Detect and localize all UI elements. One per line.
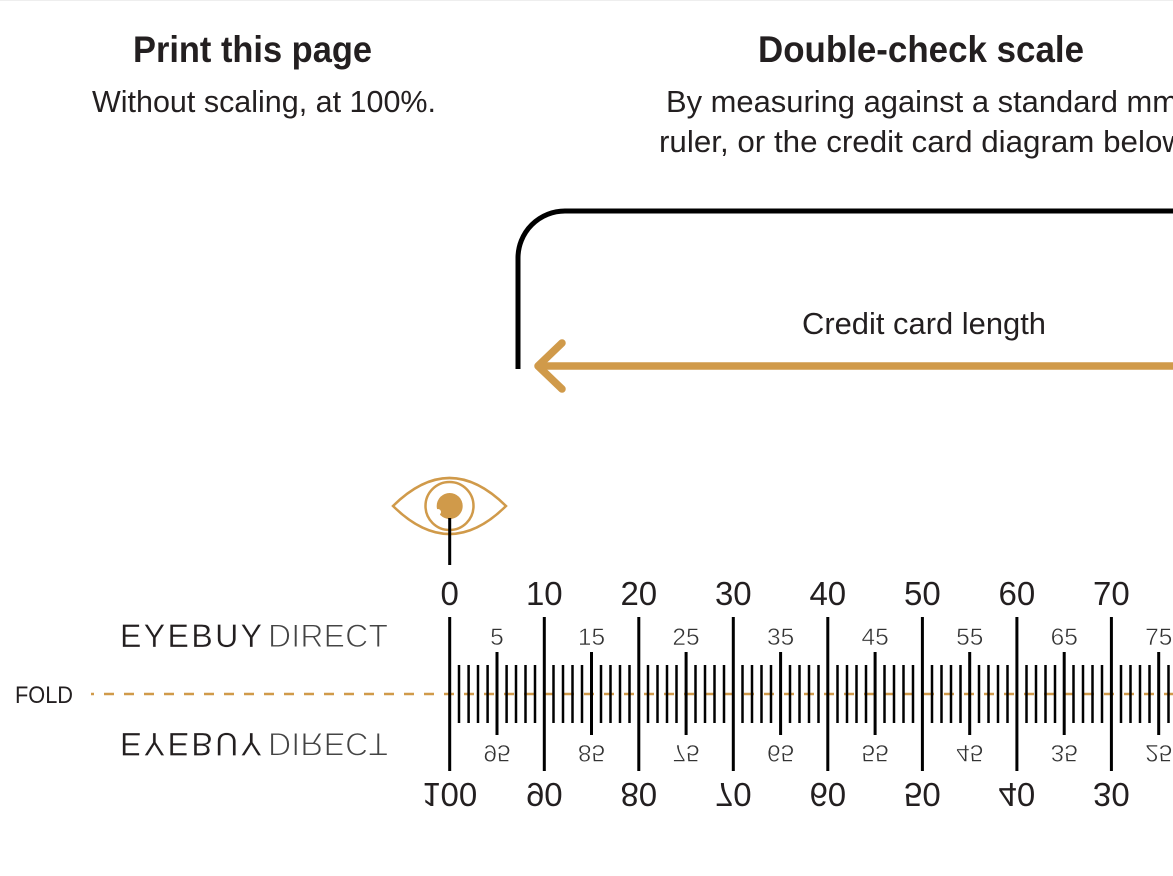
fold dashes	[91, 693, 1173, 695]
arrow: credit card length	[538, 343, 1173, 389]
text: scale instructions: By measuring against a standard mm	[666, 84, 1173, 119]
ruler numbers: bottom small flipped: 75	[672, 739, 700, 766]
fold label: FOLD	[15, 682, 73, 709]
logo: EYEBUY	[120, 618, 262, 654]
ruler numbers: top small: 75	[1145, 624, 1172, 651]
ruler numbers: bottom small flipped: 65	[767, 739, 794, 766]
text: scale instructions	[659, 84, 1173, 159]
ruler numbers: top large: 50	[904, 575, 941, 612]
ruler numbers: bottom small flipped: 25	[1145, 739, 1172, 766]
ruler numbers: top small	[490, 624, 1172, 651]
ruler numbers: top small: 25	[672, 624, 700, 651]
ruler numbers: bottom small flipped: 35	[1051, 739, 1078, 766]
heading: print this page: Print this page	[133, 29, 372, 70]
ruler numbers: bottom small flipped: 95	[483, 739, 511, 766]
logo	[120, 618, 388, 654]
ruler numbers: top small: 65	[1051, 624, 1078, 651]
ruler numbers: bottom large flipped: 30	[1093, 776, 1130, 813]
ruler numbers: top large: 0	[441, 575, 459, 612]
icon: eye	[393, 478, 506, 565]
ruler numbers: bottom large flipped: 50	[904, 776, 941, 813]
text: print instructions: Without scaling, at 100%.	[92, 84, 436, 119]
ruler numbers: top small: 15	[578, 624, 605, 651]
ruler numbers: top large: 20	[620, 575, 657, 612]
ruler numbers: top small: 5	[490, 624, 504, 651]
ruler numbers: bottom large flipped: 80	[620, 776, 657, 813]
logo: DIRECT	[268, 618, 388, 654]
text: scale instructions: ruler, or the credit card diagram below	[659, 124, 1173, 159]
ruler numbers: top large: 10	[526, 575, 563, 612]
ruler ticks: one millimetre	[459, 665, 1168, 723]
ruler numbers: bottom small flipped: 85	[578, 739, 605, 766]
ruler numbers: top large	[441, 575, 1130, 612]
logo mirrored: EYEBUY	[120, 726, 262, 762]
logo mirrored	[120, 726, 388, 762]
ruler numbers: bottom large flipped: 90	[526, 776, 563, 813]
ruler numbers: bottom large flipped	[422, 776, 1130, 813]
ruler numbers: top large: 70	[1093, 575, 1130, 612]
ruler numbers: bottom small flipped: 45	[956, 739, 983, 766]
credit card outline	[518, 211, 1173, 369]
credit card length label: Credit card length	[802, 306, 1046, 341]
ruler numbers: top small: 35	[767, 624, 794, 651]
ruler numbers: bottom small flipped	[483, 739, 1172, 766]
ruler numbers: top large: 40	[809, 575, 846, 612]
ruler numbers: bottom large flipped: 60	[809, 776, 846, 813]
ruler numbers: bottom large flipped: 40	[999, 776, 1035, 813]
ruler ticks: five millimetre	[496, 652, 1160, 735]
ruler numbers: top small: 55	[956, 624, 983, 651]
ruler numbers: bottom large flipped: 100	[422, 776, 477, 813]
ruler numbers: top large: 60	[999, 575, 1035, 612]
ruler numbers: top small: 45	[861, 624, 889, 651]
ruler numbers: bottom large flipped: 70	[715, 776, 752, 813]
ruler ticks: major	[448, 617, 1113, 771]
ruler numbers: bottom small flipped: 55	[861, 739, 889, 766]
logo mirrored: DIRECT	[268, 726, 388, 762]
heading: double-check scale: Double-check scale	[758, 29, 1084, 70]
ruler numbers: top large: 30	[715, 575, 752, 612]
